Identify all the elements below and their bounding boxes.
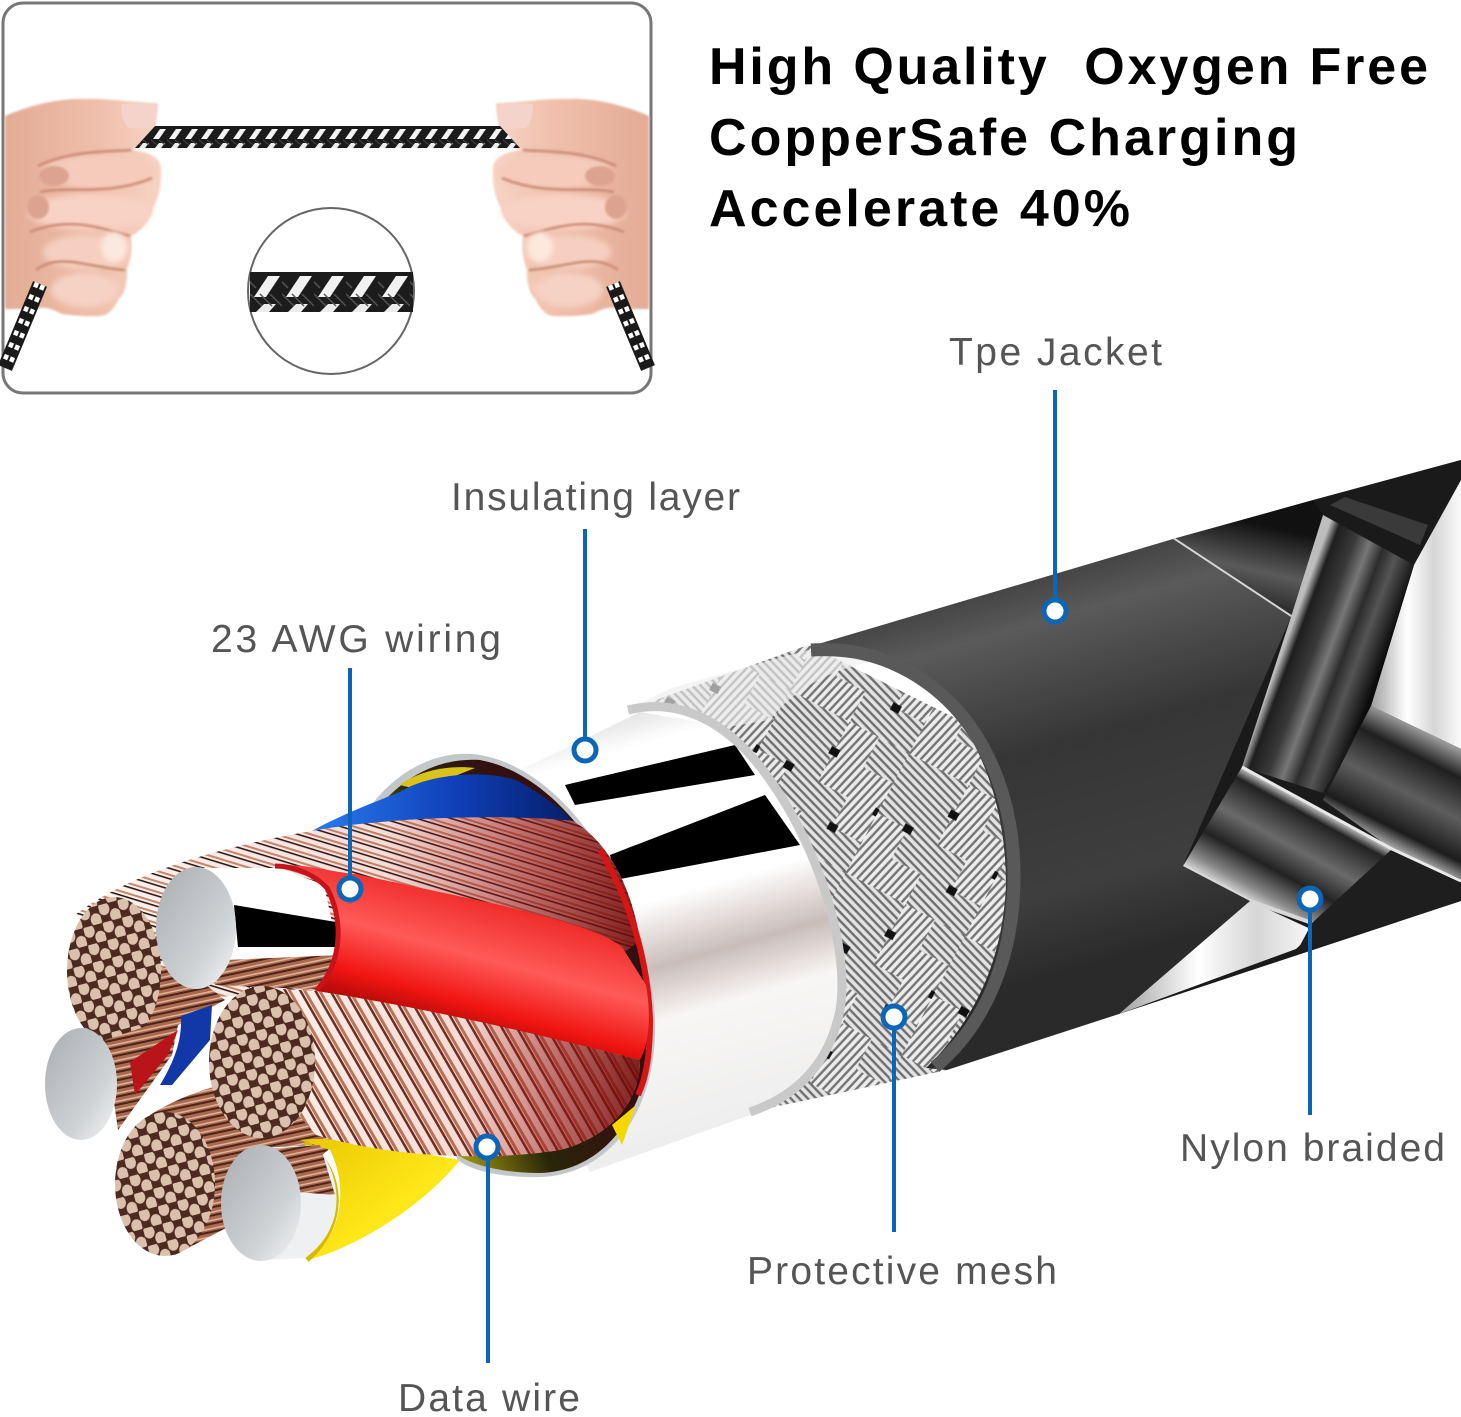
silver tube and black wire behind disc (195, 868, 340, 990)
lower-left bundle strand ends (115, 1112, 215, 1256)
silver disc bottom (221, 1145, 301, 1261)
tpe jacket (808, 539, 1291, 1070)
title (709, 38, 1428, 238)
left cable tail (5, 284, 40, 368)
callout: Data wire (398, 1136, 580, 1417)
yellow wire (300, 1139, 460, 1260)
protective mesh (628, 645, 1040, 1113)
top copper bundle (75, 817, 640, 1000)
callout: Protective mesh: Protective mesh (747, 1250, 1057, 1293)
title: CopperSafe Charging (709, 109, 1298, 167)
silver disc left (45, 1028, 117, 1140)
lower-left copper bundle (150, 1080, 345, 1255)
callout: 23 AWG wiring: 23 AWG wiring (211, 618, 501, 661)
title: High Quality Oxygen Free (709, 38, 1428, 96)
insulating layer body with black wires (500, 712, 843, 1172)
right hand (493, 99, 649, 316)
callout: Tpe Jacket (949, 331, 1162, 622)
callout: 23 AWG wiring (211, 618, 501, 900)
small yellow wire at cavity edge (612, 1105, 636, 1145)
callout: Nylon braided (1180, 888, 1445, 1170)
lower copper strands behind lower disc (255, 1145, 335, 1195)
front bundle strand ends (209, 986, 315, 1138)
right cable tail (613, 284, 648, 368)
blue wire fragment (160, 1005, 212, 1085)
left hand (5, 99, 161, 316)
silver tube behind lower disc (258, 1145, 337, 1260)
magnifier circle with braid detail (248, 208, 414, 374)
callout: Insulating layer (451, 476, 740, 761)
stretched braided cable (135, 126, 520, 148)
cable cross-section illustration (45, 460, 1461, 1261)
flared cut end of the insulation (300, 754, 655, 1177)
title: Accelerate 40% (709, 180, 1130, 238)
blue wire (312, 767, 575, 831)
panel: pull strength photo (3, 3, 651, 393)
top bundle strand ends (67, 897, 161, 1045)
front copper bundle (250, 987, 640, 1156)
flare right rim in red (600, 850, 650, 1095)
inner cavity (300, 760, 651, 1173)
callout: Protective mesh (747, 1006, 1057, 1293)
silver disc top (156, 867, 236, 989)
callout: Insulating layer: Insulating layer (451, 476, 740, 519)
callout: Nylon braided: Nylon braided (1180, 1127, 1445, 1170)
lower left strands behind disc (105, 1015, 180, 1130)
nylon braided outer sleeve (1119, 460, 1461, 1014)
copper bundle behind (95, 960, 225, 1040)
callout: Tpe Jacket: Tpe Jacket (949, 331, 1162, 374)
red wire (275, 865, 649, 1060)
